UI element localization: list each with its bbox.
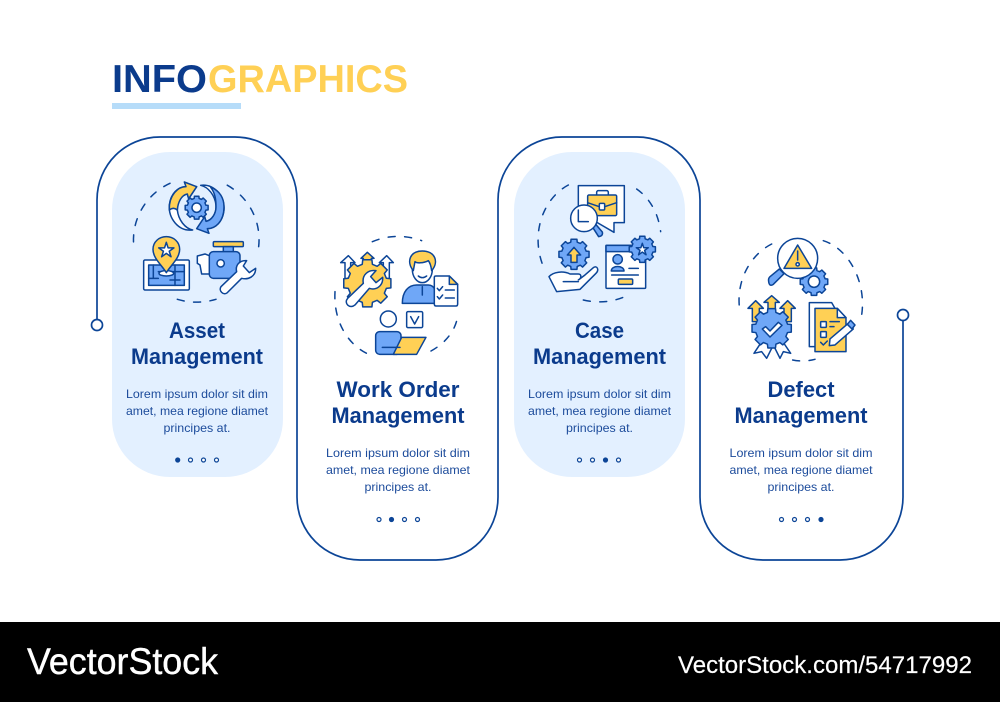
heading: case management: Management bbox=[533, 344, 667, 369]
heading: asset management: Asset bbox=[169, 318, 226, 343]
heading: asset management: Management bbox=[131, 344, 264, 369]
title underline bbox=[112, 103, 241, 109]
start node bbox=[92, 320, 102, 330]
panel backgrounds: asset and case bbox=[112, 152, 685, 477]
heading: defect management: Management bbox=[734, 403, 868, 428]
pagination dots: step 2 bbox=[377, 518, 420, 522]
footer bar: VectorStock.com/54717992 bbox=[678, 652, 972, 679]
connecting outline of four cards bbox=[97, 137, 903, 560]
icon: asset management bbox=[133, 182, 259, 302]
text: asset description: amet, mea regione diamet bbox=[126, 404, 269, 418]
heading: defect management bbox=[734, 377, 868, 428]
heading: work order management: Management bbox=[332, 403, 465, 428]
text: asset description bbox=[126, 387, 269, 435]
heading: asset management bbox=[131, 318, 264, 369]
icon: defect management bbox=[739, 238, 862, 361]
title bbox=[112, 58, 408, 101]
text: work order description: principes at. bbox=[364, 480, 432, 494]
icon: work order management bbox=[335, 236, 458, 354]
pagination dots: step 1 bbox=[176, 458, 218, 462]
heading: defect management: Defect bbox=[768, 377, 835, 402]
text: case description: Lorem ipsum dolor sit dim bbox=[528, 387, 671, 401]
text: case description bbox=[528, 387, 672, 435]
text: case description: amet, mea regione diamet bbox=[528, 404, 672, 418]
text: defect description bbox=[730, 446, 873, 494]
text: work order description: amet, mea regione diamet bbox=[326, 463, 471, 477]
text: asset description: principes at. bbox=[164, 421, 230, 435]
title: INFO bbox=[112, 58, 207, 101]
heading: work order management bbox=[332, 377, 465, 428]
text: work order description: Lorem ipsum dolor sit dim bbox=[326, 446, 470, 460]
heading: case management bbox=[533, 318, 667, 369]
text: defect description: Lorem ipsum dolor sit dim bbox=[730, 446, 872, 460]
text: work order description bbox=[326, 446, 471, 494]
icon: case management bbox=[538, 185, 661, 302]
footer bar bbox=[0, 622, 1000, 702]
text: asset description: Lorem ipsum dolor sit dim bbox=[126, 387, 268, 401]
footer bar: VectorStock bbox=[27, 641, 218, 682]
heading: work order management: Work Order bbox=[336, 377, 460, 402]
text: defect description: principes at. bbox=[768, 480, 834, 494]
pagination dots: step 3 bbox=[578, 458, 620, 462]
end node bbox=[898, 310, 908, 320]
text: defect description: amet, mea regione diamet bbox=[730, 463, 873, 477]
text: case description: principes at. bbox=[566, 421, 633, 435]
pagination dots: step 4 bbox=[780, 518, 823, 522]
heading: case management: Case bbox=[575, 318, 624, 343]
title: GRAPHICS bbox=[208, 58, 408, 101]
